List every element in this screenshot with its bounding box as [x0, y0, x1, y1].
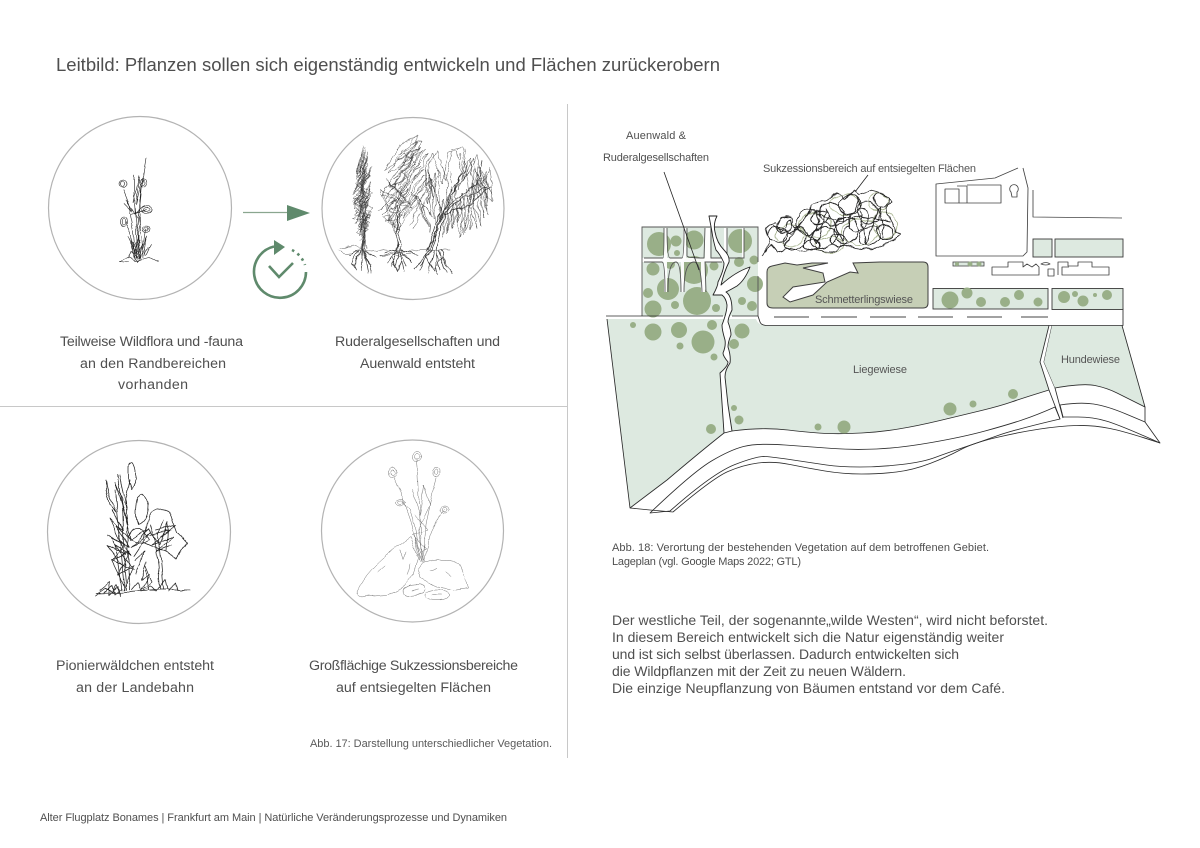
map label: Auenwald: Ruderalgesellschaften — [603, 152, 709, 164]
body text: Die einzige Neupflanzung von Bäumen entstand vor dem Café. — [612, 680, 1005, 696]
panel: trees circle — [322, 118, 504, 300]
caption: wild flora: an den Randbereichen — [80, 356, 226, 372]
panel: small buildings — [992, 262, 1109, 276]
icon: pioneer wood sketch — [95, 463, 190, 596]
caption: succession: auf entsiegelten Flächen — [336, 680, 491, 696]
figure caption 17: Abb. 17: Darstellung unterschiedlicher Vegetation. — [310, 738, 552, 750]
panel: Schmetterlingswiese — [767, 262, 928, 308]
caption: pioneer wood: Pionierwäldchen entsteht — [56, 658, 214, 674]
map label: Liegewiese: Liegewiese — [853, 364, 907, 376]
leader line: Auenwald — [664, 172, 699, 270]
panel: meadow Hundewiese — [1044, 326, 1145, 407]
map label: Hundewiese: Hundewiese — [1061, 354, 1120, 366]
caption: succession: Großflächige Sukzessionsbereiche — [309, 658, 518, 674]
road top line — [606, 308, 1123, 326]
panel: succession circle — [322, 440, 504, 622]
map label: Schmetterlingswiese: Schmetterlingswiese — [815, 294, 913, 306]
body text: In diesem Bereich entwickelt sich die Natur eigenständig weiter — [612, 629, 1004, 645]
map label: succession area: Sukzessionsbereich auf entsiegelten Flächen — [763, 163, 976, 175]
caption: pioneer wood: an der Landebahn — [76, 680, 194, 696]
panel: small green plots — [953, 239, 1123, 266]
panel: tree strip right — [1052, 288, 1123, 310]
stream — [709, 216, 750, 433]
panel: wild flora circle — [48, 116, 232, 300]
figure caption 18: Lageplan (vgl. Google Maps 2022; GTL) — [612, 556, 801, 568]
site plan map — [603, 130, 1160, 513]
dashed path — [774, 316, 1048, 318]
body text: Der westliche Teil, der sogenannte„wilde Westen“, wird nicht beforstet. — [612, 612, 1048, 628]
caption: wild flora: Teilweise Wildflora und -fauna — [60, 334, 243, 350]
body text — [612, 612, 1048, 696]
leader line: succession area — [855, 175, 868, 192]
caption: ruderal: Auenwald entsteht — [360, 356, 475, 372]
panel: Auenwald block — [642, 227, 763, 318]
title: Leitbild: Pflanzen sollen sich eigenständig entwickeln und Flächen zurückerobern — [56, 54, 720, 75]
figure caption 18 — [612, 542, 989, 568]
arrow — [243, 205, 310, 221]
caption: pioneer wood — [56, 658, 214, 696]
icon: small wild plant sketch — [119, 158, 158, 263]
caption: wild flora: vorhanden — [118, 377, 188, 393]
icon: clock with check mark — [254, 240, 306, 298]
map label: Auenwald — [603, 130, 709, 164]
panel: pioneer wood circle — [48, 440, 230, 624]
panel: tree strip centre — [933, 288, 1048, 309]
panel: right green strip — [1060, 403, 1160, 443]
caption: succession — [309, 658, 518, 696]
figure caption 18: Abb. 18: Verortung der bestehenden Vegetation auf dem betroffenen Gebiet. — [612, 542, 989, 554]
caption: ruderal — [335, 334, 500, 372]
lower tree circles — [630, 320, 1018, 434]
panel: large building block — [936, 168, 1122, 256]
body text: und ist sich selbst überlassen. Dadurch entwickelten sich — [612, 646, 959, 662]
caption: wild flora — [60, 334, 243, 393]
map label: Auenwald: Auenwald & — [626, 130, 687, 142]
footer: Alter Flugplatz Bonames | Frankfurt am Main | Natürliche Veränderungsprozesse und Dynamiken — [40, 812, 507, 824]
icon: flowers on rocks sketch — [357, 452, 468, 600]
panel: meadow Liegewiese — [607, 319, 1049, 508]
icon: poplar, young tree and willow sketch — [338, 136, 492, 274]
panel: lower green strip — [650, 407, 1060, 513]
succession area scribble — [763, 190, 900, 256]
body text: die Wildpflanzen mit der Zeit zu neuen Wäldern. — [612, 663, 906, 679]
caption: ruderal: Ruderalgesellschaften und — [335, 334, 500, 350]
